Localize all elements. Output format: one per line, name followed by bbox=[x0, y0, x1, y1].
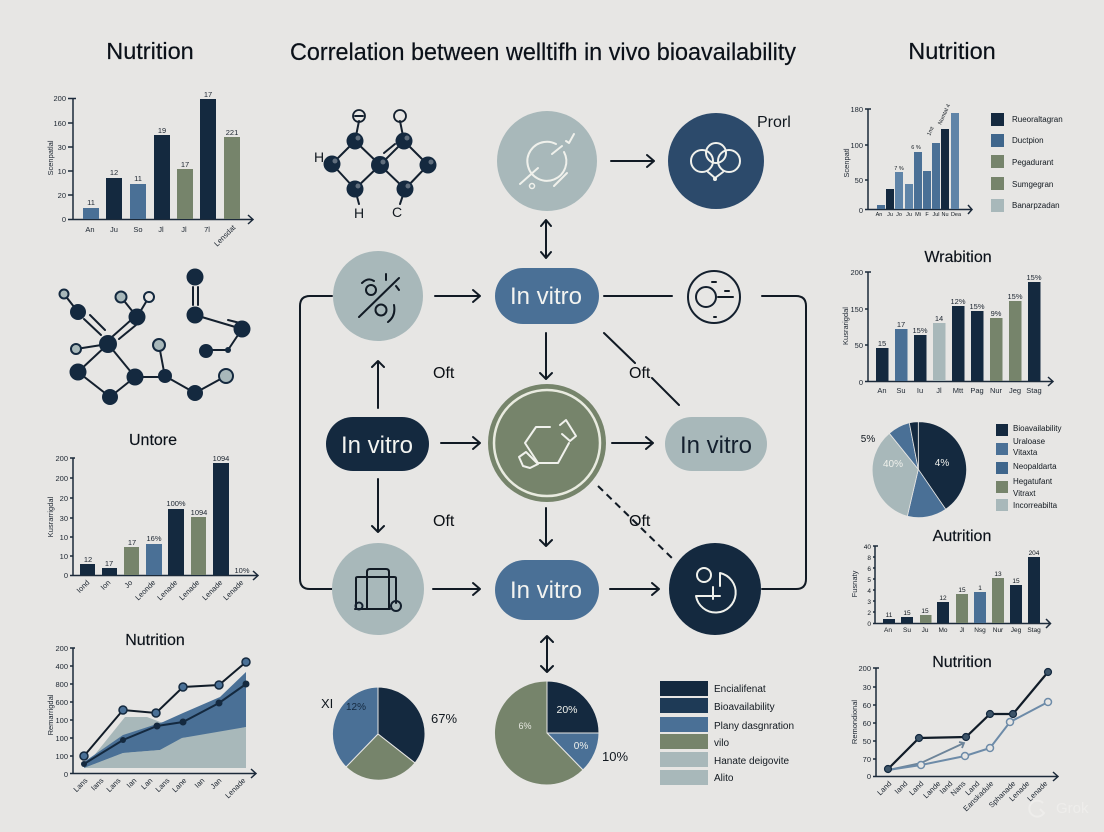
line chart: lower right: Iand bbox=[938, 779, 954, 796]
pie chart: lower center left bbox=[321, 687, 457, 780]
bar chart: Wrabition: 15% bbox=[1007, 292, 1023, 301]
pill: In vitro navy: In vitro bbox=[341, 432, 413, 459]
bar chart: top left: 200 bbox=[53, 94, 66, 103]
legend: pie right: Neopaldarta bbox=[1013, 462, 1057, 471]
legend: center bottom: Encialifenat bbox=[714, 684, 766, 695]
legend: pie right: Vitraxt bbox=[1013, 489, 1036, 498]
bar chart: Untore: Iond bbox=[75, 578, 91, 595]
line chart: lower right: 50 bbox=[863, 737, 871, 746]
legend: center bottom: Plany dasgnration bbox=[714, 721, 794, 732]
bar chart: Autrition: 15 bbox=[921, 608, 929, 615]
bar chart: Untore bbox=[46, 454, 258, 602]
legend: top right: Rueoraltagran bbox=[1012, 115, 1063, 124]
bar chart: top right: Jo bbox=[896, 212, 902, 218]
bar chart: Wrabition: Kusrarigdal bbox=[841, 307, 850, 345]
bar chart: Wrabition: 0 bbox=[859, 378, 863, 387]
arrow: navy pill up to pale circle bbox=[372, 361, 384, 408]
pie chart: right bbox=[861, 422, 967, 518]
bar chart: top left: 12 bbox=[110, 168, 118, 177]
bar chart: Wrabition: 12% bbox=[950, 297, 966, 306]
area and line chart: lower left: Lan bbox=[139, 776, 154, 791]
bar chart: top left: 221 bbox=[226, 128, 238, 137]
bar chart: Wrabition: 14 bbox=[935, 314, 943, 323]
legend: center bottom: Bioavailability bbox=[714, 702, 775, 713]
bar chart: Untore: Ion bbox=[99, 578, 112, 592]
bar chart: top left: Scenpatlal bbox=[46, 140, 55, 176]
pie chart: right: 40% bbox=[883, 459, 903, 470]
bar chart: top left: An bbox=[85, 225, 95, 234]
line chart: lower right: Land bbox=[875, 779, 893, 797]
bar chart: Untore: 100% bbox=[166, 499, 186, 508]
bar chart: Autrition: 5 bbox=[867, 577, 871, 584]
double arrow: blue pill to pie bbox=[541, 636, 553, 672]
bar chart: Autrition: Nur bbox=[993, 627, 1004, 634]
line chart: lower right: 60 bbox=[863, 719, 871, 728]
bar chart: Autrition: Ju bbox=[922, 627, 929, 634]
line chart: lower right: 30 bbox=[863, 683, 871, 692]
bar chart: Wrabition: Iu bbox=[917, 386, 923, 395]
legend: top right bbox=[991, 113, 1063, 212]
area and line chart: lower left: Ian bbox=[193, 776, 206, 790]
area and line chart: lower left: 100 bbox=[55, 752, 68, 761]
bar chart: Autrition: Su bbox=[903, 627, 911, 634]
line chart: lower right: Iand bbox=[893, 779, 909, 796]
bar chart: top right: Dea bbox=[951, 212, 962, 218]
bar chart: top left: 10 bbox=[58, 167, 66, 176]
bar chart: top right: 180 bbox=[850, 105, 863, 114]
bar chart: Wrabition: 17 bbox=[897, 320, 905, 329]
area and line chart: lower left: 0 bbox=[64, 770, 68, 779]
area and line chart: lower left: 600 bbox=[55, 698, 68, 707]
bar chart: top right: F bbox=[925, 212, 929, 218]
bar chart: top right: Nu bbox=[941, 212, 949, 218]
bar chart: top left: 17 bbox=[204, 90, 212, 99]
heading: Autrition: Autrition bbox=[933, 528, 991, 545]
bar chart: top left: So bbox=[133, 225, 143, 234]
legend: top right: Banarpzadan bbox=[1012, 201, 1060, 210]
bar chart: Untore: 0 bbox=[64, 571, 68, 580]
bar chart: top left: 11 bbox=[134, 174, 142, 183]
bar chart: top right: 7 % bbox=[894, 166, 904, 172]
title: Correlation between welltifh in vivo bioavailability bbox=[290, 39, 796, 66]
icon: circle with crossing lines bbox=[520, 134, 574, 188]
legend: pie right: Uraloase bbox=[1013, 437, 1046, 446]
arrow: green circle down to blue pill bbox=[540, 508, 552, 546]
arrow: pill down to green circle bbox=[540, 333, 552, 379]
bar chart: Untore: 10% bbox=[234, 566, 250, 575]
bar chart: top left: Lensdat bbox=[212, 222, 238, 248]
bar chart: Autrition: 0 bbox=[867, 621, 871, 628]
legend: pie right: Hegatufant bbox=[1013, 477, 1053, 486]
bar chart: top right: 50 bbox=[855, 176, 863, 185]
connector: diagonal line bbox=[604, 333, 679, 405]
bar chart: Wrabition: Jl bbox=[936, 386, 942, 395]
bar chart: Autrition: 15 bbox=[1012, 578, 1020, 585]
icon: percent symbol bbox=[359, 274, 399, 322]
double arrow: top circle to in vitro bbox=[541, 220, 551, 258]
bar chart: Autrition: 13 bbox=[994, 571, 1002, 578]
bar chart: Untore: Lenade bbox=[221, 578, 245, 602]
bar chart: Untore: 12 bbox=[84, 555, 92, 564]
area and line chart: lower left: 800 bbox=[55, 680, 68, 689]
molecule: center top: H bbox=[354, 205, 364, 221]
bar chart: Untore: 1094 bbox=[213, 454, 229, 463]
molecule: center top bbox=[314, 110, 436, 221]
bar chart: Wrabition: 200 bbox=[850, 268, 863, 277]
bar chart: top right: 0 bbox=[859, 206, 863, 215]
node: green circle bbox=[488, 384, 606, 502]
pill: In vitro pale bbox=[665, 417, 767, 471]
bar chart: Autrition: Fusnaty bbox=[850, 570, 859, 597]
bar chart: Untore: 200 bbox=[55, 474, 68, 483]
line chart: lower right: 70 bbox=[863, 755, 871, 764]
bar chart: Wrabition: 150 bbox=[850, 305, 863, 314]
node: dark blue circle bbox=[668, 113, 764, 209]
area and line chart: lower left: 400 bbox=[55, 662, 68, 671]
bar chart: Untore: 16% bbox=[146, 534, 162, 543]
legend: pie right: Incorreabilta bbox=[1013, 501, 1058, 510]
heading: Nutrition lower left: Nutrition bbox=[125, 632, 185, 649]
pie chart: lower center right bbox=[494, 681, 628, 785]
pill: In vitro navy bbox=[326, 417, 429, 471]
node: pale circle top bbox=[497, 111, 597, 211]
molecule: center top: H bbox=[314, 149, 324, 165]
heading: right Nutrition: Nutrition bbox=[908, 38, 996, 64]
line chart: lower right: Land bbox=[963, 779, 981, 797]
connector: dashed diagonal bbox=[598, 486, 674, 560]
bar chart: top left: Jl bbox=[181, 225, 187, 234]
node: pale circle bag bbox=[332, 543, 424, 635]
bar chart: Wrabition: An bbox=[877, 386, 887, 395]
bar chart: Autrition: 4 bbox=[867, 588, 871, 595]
arrow: top circle to blue circle bbox=[611, 155, 654, 167]
bar chart: Untore: 17 bbox=[105, 559, 113, 568]
area and line chart: lower left: Ians bbox=[89, 776, 106, 792]
bar chart: top right: Mi bbox=[915, 212, 921, 218]
line chart: lower right: 60 bbox=[863, 701, 871, 710]
legend: pie right: Vitaxta bbox=[1013, 448, 1038, 457]
bar chart: Autrition: 6 bbox=[867, 566, 871, 573]
bar chart: top left: 7l bbox=[204, 225, 210, 234]
line chart: lower right: Lenade bbox=[1025, 779, 1049, 803]
line chart: lower right: Remondional bbox=[850, 700, 859, 744]
bar chart: top right: 100 bbox=[850, 141, 863, 150]
bar chart: Untore: Leonde bbox=[133, 578, 157, 602]
bar chart: top left: 160 bbox=[53, 119, 66, 128]
bar chart: top right: Ju bbox=[887, 212, 893, 218]
bar chart: Autrition: Jl bbox=[960, 627, 965, 634]
area and line chart: lower left: Lans bbox=[72, 776, 90, 794]
connector frame bbox=[300, 296, 806, 589]
bar chart: top left: 19 bbox=[158, 126, 166, 135]
legend: pie right: Bioavailability bbox=[1013, 424, 1061, 433]
line chart: lower right: Land bbox=[907, 779, 925, 797]
label: Oft lower left: Oft bbox=[433, 513, 455, 530]
bar chart: top right bbox=[842, 103, 972, 218]
heading: Nutrition lower right: Nutrition bbox=[932, 654, 992, 671]
node: pale circle percent bbox=[333, 251, 423, 341]
line chart: lower right: Nans bbox=[949, 779, 968, 798]
pie chart: right: 4% bbox=[935, 458, 949, 469]
bar chart: Autrition: 1 bbox=[978, 585, 982, 592]
bar chart: Autrition: 40 bbox=[864, 544, 871, 551]
bar chart: Wrabition: Pag bbox=[970, 386, 984, 395]
bar chart: Wrabition: 15% bbox=[1026, 273, 1042, 282]
molecule: center top: C bbox=[392, 204, 402, 220]
line chart: lower right: 0 bbox=[867, 772, 871, 781]
pie chart: lower center left: XI bbox=[321, 696, 333, 711]
bar chart: top right: An bbox=[876, 212, 882, 218]
pie chart: lower center left: 12% bbox=[346, 702, 366, 713]
bar chart: Autrition: 204 bbox=[1029, 550, 1040, 557]
pill: In vitro lower: In vitro bbox=[510, 577, 582, 604]
label: Prorl: Prorl bbox=[757, 114, 791, 131]
bar chart: top right: 6 % bbox=[911, 145, 921, 151]
bar chart: Untore: 17 bbox=[128, 538, 136, 547]
bar chart: Wrabition: 15% bbox=[912, 326, 928, 335]
node: navy circle bbox=[669, 543, 761, 635]
pie chart: lower center right: 6% bbox=[518, 721, 532, 731]
bar chart: Wrabition: 15 bbox=[878, 339, 886, 348]
bar chart: Wrabition bbox=[841, 268, 1053, 395]
bar chart: Autrition: 11 bbox=[886, 612, 893, 619]
bar chart: top right: Numtal 4 bbox=[937, 103, 952, 126]
line chart: lower right bbox=[850, 664, 1058, 813]
area and line chart: lower left: Ian bbox=[125, 776, 138, 790]
bar chart: Wrabition: 9% bbox=[991, 309, 1002, 318]
bar chart: top left: 0 bbox=[62, 215, 66, 224]
line chart: lower right: Lande bbox=[921, 779, 942, 800]
arrow: pale circle to in vitro bbox=[435, 290, 480, 302]
bar chart: top right: Scenpatl bbox=[842, 148, 851, 178]
area and line chart: lower left: 200 bbox=[55, 644, 68, 653]
bar chart: Autrition: Stag bbox=[1027, 627, 1041, 634]
bar chart: top left: 30 bbox=[58, 143, 66, 152]
arrow: navy pill down to pale circle bbox=[372, 479, 384, 532]
area and line chart: lower left: Jan bbox=[208, 776, 223, 791]
bar chart: Untore: 10 bbox=[60, 552, 68, 561]
bar chart: Autrition: 8 bbox=[867, 555, 871, 562]
bar chart: top left: Ju bbox=[110, 225, 118, 234]
bar chart: Untore: Jo bbox=[122, 578, 134, 590]
pie chart: right: 5% bbox=[861, 434, 875, 445]
area and line chart: lower left: Lans bbox=[154, 776, 172, 794]
label: Oft upper right: Oft bbox=[629, 365, 651, 382]
bar chart: Wrabition: 50 bbox=[855, 341, 863, 350]
bar chart: top right: 1mt bbox=[926, 126, 936, 137]
bar chart: Untore: 20 bbox=[60, 494, 68, 503]
legend: top right: Ductpion bbox=[1012, 136, 1044, 145]
watermark: Grok bbox=[1029, 800, 1089, 817]
legend: center bottom: vilo bbox=[714, 738, 729, 749]
area and line chart: lower left: 100 bbox=[55, 734, 68, 743]
bar chart: Autrition: 2 bbox=[867, 610, 871, 617]
bar chart: Autrition: 15 bbox=[903, 610, 911, 617]
connector: pill to outline icon bbox=[604, 295, 672, 297]
heading: Untore: Untore bbox=[129, 432, 177, 449]
icon: bag bbox=[355, 569, 401, 611]
legend: top right: Sumgegran bbox=[1012, 180, 1053, 189]
line chart: lower right: Lenade bbox=[1007, 779, 1031, 803]
bar chart: Untore: 200 bbox=[55, 454, 68, 463]
bar chart: Wrabition: 15% bbox=[969, 302, 985, 311]
bar chart: top right: Ju bbox=[906, 212, 912, 218]
line chart: lower right: 200 bbox=[858, 664, 871, 673]
bar chart: Untore: Lenade bbox=[200, 578, 224, 602]
legend: pie right bbox=[996, 424, 1061, 511]
bar chart: Untore: Lenade bbox=[177, 578, 201, 602]
pill: In vitro top bbox=[495, 268, 599, 324]
bar chart: Wrabition: Nur bbox=[990, 386, 1003, 395]
line chart: lower right: Eanskadule bbox=[961, 779, 995, 813]
pill: In vitro lower bbox=[495, 560, 599, 620]
arrow: blue pill to navy circle bbox=[610, 583, 659, 595]
pie chart: lower center left: 67% bbox=[431, 711, 457, 726]
watermark: Grok: Grok bbox=[1056, 800, 1089, 817]
area and line chart: lower left: Lenade bbox=[223, 776, 247, 800]
bar chart: Wrabition: Mtt bbox=[953, 386, 964, 395]
pill: In vitro pale: In vitro bbox=[680, 432, 752, 459]
icon: hexagon rings bbox=[519, 420, 576, 468]
bar chart: top right: Jul bbox=[932, 212, 940, 218]
bar chart: top left: 17 bbox=[181, 160, 189, 169]
bar chart: top left: 11 bbox=[87, 198, 95, 207]
bar chart: Autrition: 15 bbox=[958, 587, 966, 594]
icon: outlined circle bbox=[688, 271, 740, 323]
legend: center bottom: Hanate deigovite bbox=[714, 756, 789, 767]
heading: left Nutrition: Nutrition bbox=[106, 38, 194, 64]
area and line chart: lower left: 100 bbox=[55, 716, 68, 725]
bar chart: Autrition: 12 bbox=[939, 595, 947, 602]
legend: center bottom: Alito bbox=[714, 773, 734, 784]
bar chart: top left bbox=[46, 90, 253, 248]
pie chart: lower center right: 10% bbox=[602, 749, 628, 764]
line chart: lower right: Sphanade bbox=[987, 779, 1017, 810]
bar chart: Wrabition: Stag bbox=[1026, 386, 1042, 395]
legend: top right: Pegadurant bbox=[1012, 158, 1054, 167]
area and line chart: lower left: Lans bbox=[105, 776, 123, 794]
icon: three linked circles bbox=[691, 143, 740, 181]
icon: person pie bbox=[696, 568, 736, 613]
pill: In vitro top: In vitro bbox=[510, 283, 582, 310]
bar chart: Autrition bbox=[850, 544, 1050, 634]
heading: Wrabition: Wrabition bbox=[924, 249, 992, 266]
bar chart: Untore: 1094 bbox=[191, 508, 207, 517]
bar chart: Autrition: 3 bbox=[867, 599, 871, 606]
area and line chart: lower left: Remarrigdal bbox=[46, 694, 55, 735]
bar chart: Untore: 10 bbox=[60, 533, 68, 542]
bar chart: Autrition: Nsg bbox=[974, 627, 986, 634]
bar chart: Autrition: Mo bbox=[938, 627, 948, 634]
bar chart: Untore: Lenade bbox=[155, 578, 179, 602]
area and line chart: lower left: Lane bbox=[170, 776, 188, 794]
arrow: navy pill to green circle bbox=[441, 437, 480, 449]
pie chart: lower center right: 20% bbox=[556, 704, 578, 716]
label: Oft upper left: Oft bbox=[433, 365, 455, 382]
bar chart: Untore: 30 bbox=[60, 514, 68, 523]
bar chart: top left: Jl bbox=[158, 225, 164, 234]
arrow: green circle to pale pill bbox=[612, 437, 653, 449]
molecule: left bbox=[60, 268, 250, 405]
bar chart: Autrition: An bbox=[884, 627, 892, 634]
bar chart: Wrabition: Su bbox=[896, 386, 906, 395]
bar chart: top left: 20 bbox=[58, 191, 66, 200]
bar chart: Untore: Kusrarrigdal bbox=[46, 496, 55, 537]
legend: center bottom bbox=[660, 681, 794, 785]
arrow: bag circle to blue pill bbox=[433, 583, 480, 595]
pie chart: lower center right: 0% bbox=[574, 741, 588, 752]
area and line chart: lower left bbox=[46, 644, 256, 800]
label: Oft lower right: Oft bbox=[629, 513, 651, 530]
bar chart: Wrabition: Jeg bbox=[1009, 386, 1021, 395]
bar chart: Autrition: Jeg bbox=[1011, 627, 1022, 634]
